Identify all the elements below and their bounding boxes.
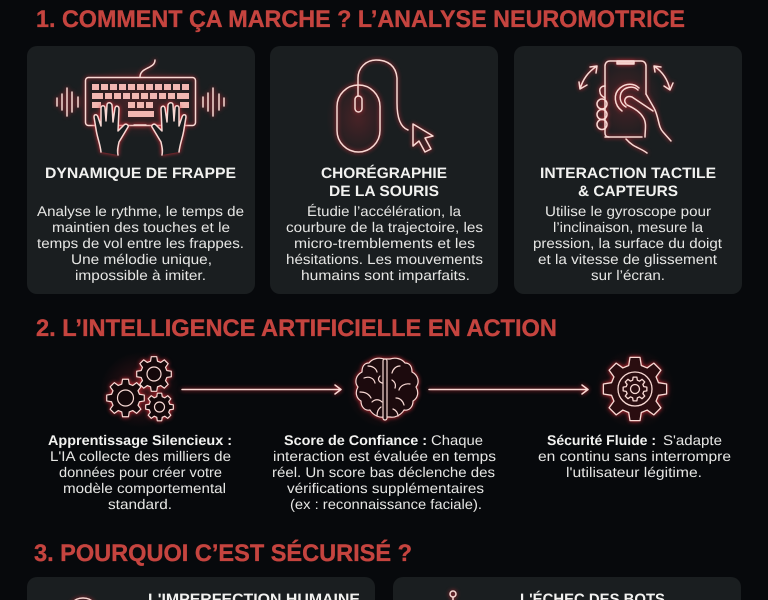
title: section 1: 1. COMMENT ÇA MARCHE ? L’ANALYSE NEUROMOTRICE [36,6,685,33]
card heading: DYNAMIQUE DE FRAPPE [45,165,236,182]
icon: mouse and cursor [326,60,433,158]
card text: Analyse le rythme, le temps de [37,203,244,219]
icon: bot antenna [450,591,456,600]
icon: keyboard and hands [57,60,224,155]
text: score de confiance: réel. Un score bas déclenche des [272,464,495,480]
icon: large gear [595,349,675,429]
text: apprentissage silencieux: Apprentissage Silencieux : [48,432,232,448]
panel: l'échec des bots [393,577,741,600]
card text [286,203,483,283]
card heading [321,164,447,200]
text: apprentissage silencieux: données pour créer votre [59,464,222,480]
panel: chorégraphie de la souris [270,46,498,294]
card text: humains sont imparfaits. [301,267,470,283]
card text: sur l’écran. [591,267,665,283]
text: apprentissage silencieux: standard. [108,496,172,512]
text: score de confiance: Chaque [431,432,483,448]
text: apprentissage silencieux: L'IA collecte des milliers de [50,448,231,464]
text: sécurité fluide: en continu sans interrompre [538,448,731,464]
title: section 3: 3. POURQUOI C’EST SÉCURISÉ ? [34,539,412,567]
text: score de confiance: Score de Confiance : [284,432,427,448]
icon: brain [346,352,422,428]
title: section 2: 2. L’INTELLIGENCE ARTIFICIELLE EN ACTION [36,315,557,342]
card text: micro-tremblements et les [294,235,475,251]
card heading: DE LA SOURIS [329,183,439,200]
text: apprentissage silencieux [48,432,232,512]
icon: three gears [100,352,180,428]
text: sécurité fluide: Sécurité Fluide : [547,432,656,448]
card text: temps de vol entre les frappes. [37,235,244,251]
card text: et la vitesse de glissement [538,251,717,267]
card heading: INTERACTION TACTILE [540,165,716,182]
text: score de confiance [272,432,496,512]
text: apprentissage silencieux: modèle comportemental [63,480,226,496]
card text: Étudie l’accélération, la [307,203,461,219]
text: score de confiance: interaction est évaluée en temps [273,448,496,464]
card text: courbure de la trajectoire, les [286,219,483,235]
card text: impossible à imiter. [75,267,206,283]
card text [533,203,722,283]
card text: hésitations. Les mouvements [286,251,483,267]
arrow: brain to gear [429,385,588,394]
panel: interaction tactile [514,46,742,294]
text: sécurité fluide [538,432,731,480]
icon: human imperfection [72,598,94,600]
panel: dynamique de frappe [27,46,255,294]
card text: maintien des touches et le [52,219,230,235]
text: score de confiance: (ex : reconnaissance faciale). [290,496,482,512]
card text: Une mélodie unique, [71,251,212,267]
icon: phone with hand [579,56,673,153]
text: sécurité fluide: S'adapte [663,432,722,448]
card text [37,203,244,283]
panel: l'imperfection humaine [27,577,375,600]
card text: l’inclinaison, mesure la [553,219,703,235]
text: score de confiance: vérifications supplémentaires [287,480,484,496]
card heading [540,165,716,200]
text: sécurité fluide: l'utilisateur légitime. [566,464,702,480]
card heading: & CAPTEURS [578,183,678,200]
card text: Utilise le gyroscope pour [545,203,711,219]
card heading: CHORÉGRAPHIE [321,164,447,182]
card text: pression, la surface du doigt [533,235,722,251]
arrow: gears to brain [182,385,341,394]
